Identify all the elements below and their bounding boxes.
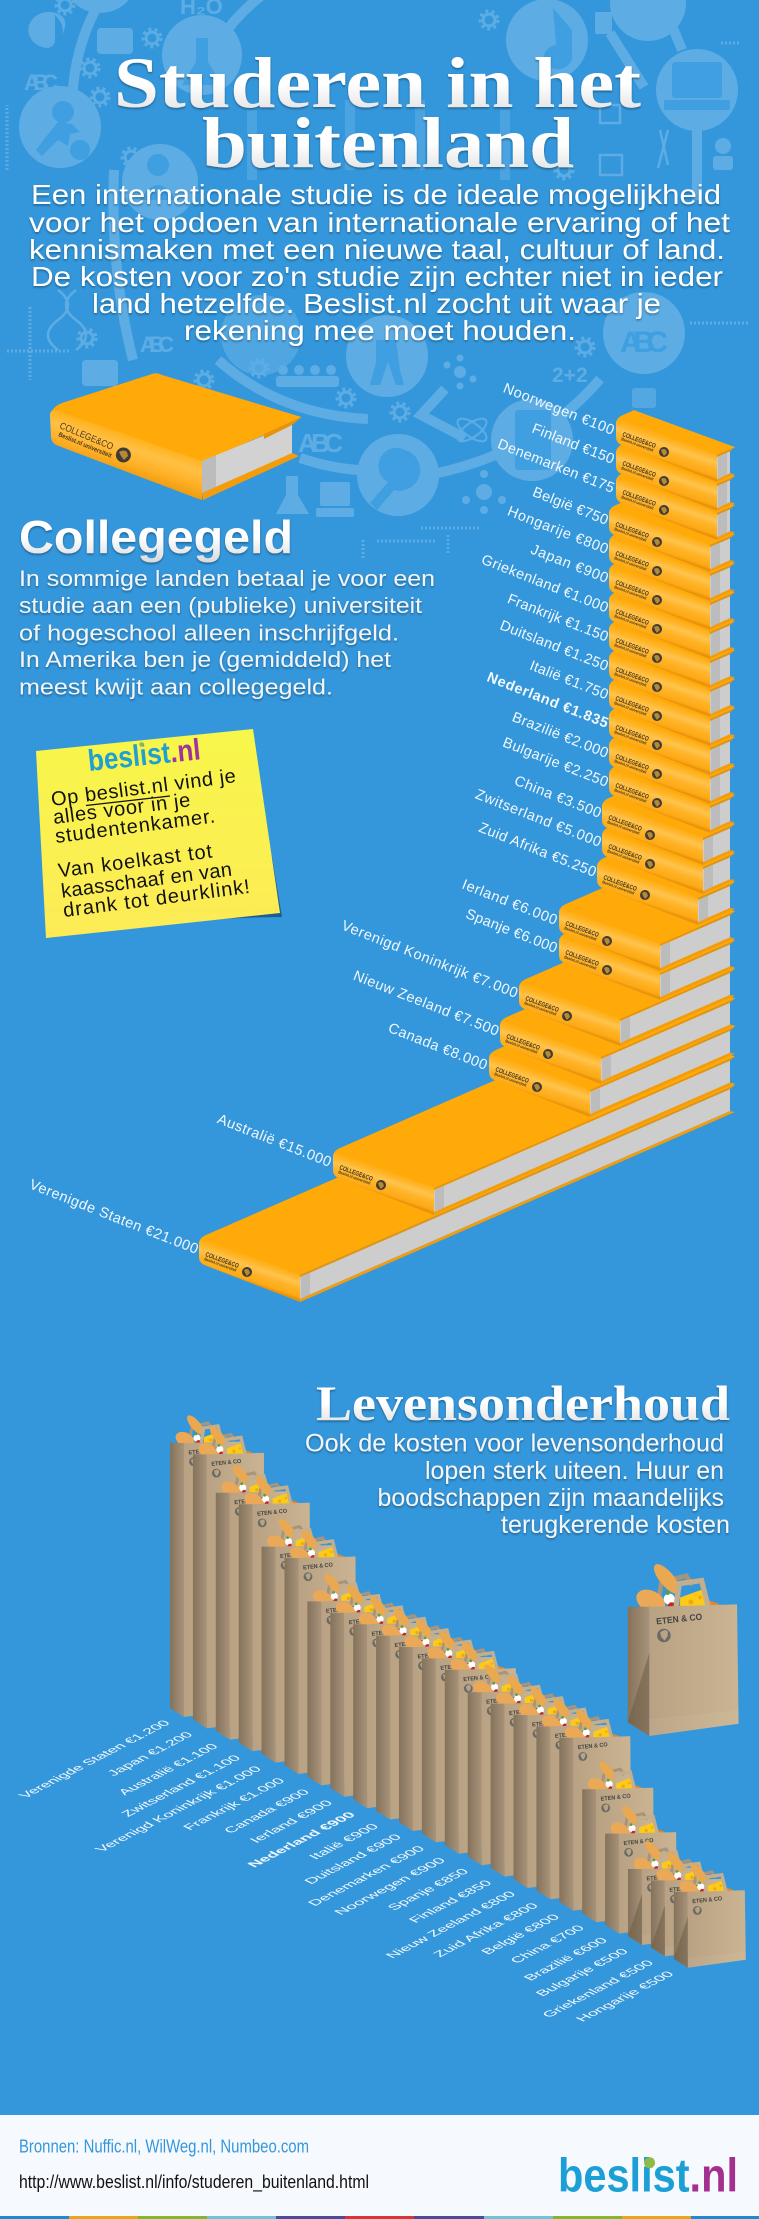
book: Noorwegen: COLLEGE&CO (621, 431, 657, 450)
bag: België (559, 1708, 631, 1911)
book: België (609, 497, 735, 572)
book: Ierland: Beslist.nl universiteit (564, 925, 598, 942)
bag: Brazilië (605, 1803, 677, 1934)
tuition labels: Zwitserland €5.000 (473, 787, 603, 851)
bag: Spanje (468, 1662, 540, 1865)
title: Studeren in het (114, 43, 641, 123)
tuition labels: Noorwegen €100 (501, 381, 616, 439)
book: Zuid Afrika: Beslist.nl universiteit (602, 879, 636, 896)
book: Brazilië: Beslist.nl universiteit (614, 758, 648, 775)
intro text: De kosten voor zo'n studie zijn echter niet in ieder (31, 261, 723, 292)
book: Denemarken: COLLEGE&CO (621, 489, 657, 508)
background pattern: education icons: 2+2 (552, 364, 588, 387)
cost of living labels: Zwitserland €1.100 (117, 1753, 244, 1818)
tuition labels: Italië €1.750 (527, 658, 610, 703)
cost of living labels: Spanje €850 (384, 1866, 472, 1912)
bag: Noorwegen: ETEN & CO (463, 1674, 494, 1683)
text block: tuition explanation: meest kwijt aan collegegeld. (19, 674, 333, 700)
bag: Italië (376, 1605, 448, 1820)
bag: Spanje: ETEN & CO (486, 1697, 517, 1706)
tuition labels: China €3.500 (512, 773, 603, 822)
background pattern: education icons: ABC (620, 326, 668, 359)
intro text: kennismaken met een nieuwe taal, cultuur of land. (29, 234, 725, 265)
cost of living labels: Frankrijk €1.000 (179, 1776, 288, 1832)
cost of living labels: China €700 (506, 1923, 588, 1965)
background pattern: education icons: ABC (24, 70, 58, 95)
text block: cost of living explanation: Ook de kosten voor levensonderhoud (305, 1430, 724, 1458)
bag: Australië (216, 1463, 288, 1740)
book: Frankrijk: COLLEGE&CO (614, 637, 650, 656)
bag: Hongarije (674, 1862, 746, 1968)
sticky note callout: Op beslist.nl vind je (50, 765, 237, 811)
bag: Denemarken: ETEN & CO (440, 1663, 471, 1672)
cost of living labels: Australië €1.100 (114, 1741, 222, 1797)
book: Nederland: Beslist.nl universiteit (614, 729, 648, 746)
cost of living labels: Nieuw Zeeland €800 (382, 1889, 519, 1960)
bag: China (582, 1759, 654, 1922)
book: Griekenland: Beslist.nl universiteit (614, 613, 648, 630)
bag: Italië: ETEN & CO (394, 1640, 425, 1649)
book: Japan: COLLEGE&CO (614, 579, 650, 598)
book: Finland: Beslist.nl universiteit (621, 465, 655, 482)
text block: cost of living explanation (305, 1430, 730, 1539)
book: Bulgarije: COLLEGE&CO (614, 782, 650, 801)
sources text: Bronnen: Nuffic.nl, WilWeg.nl, Numbeo.com (19, 2137, 309, 2157)
book: België: Beslist.nl universiteit (614, 526, 648, 543)
book: Spanje (559, 903, 735, 1000)
logo: beslist.nl: beslist.nl (558, 2149, 738, 2202)
tuition labels: Ierland €6.000 (460, 877, 559, 929)
cost of living labels: Denemarken €900 (304, 1844, 428, 1908)
book: Nederland: COLLEGE&CO (614, 724, 650, 743)
source url: http://www.beslist.nl/info/studeren_buitenland.html (19, 2172, 369, 2193)
book: Verenigde Staten: Beslist.nl universiteit (204, 1256, 238, 1273)
sticky note callout: beslist.nl (86, 733, 202, 778)
book: Australië: COLLEGE&CO (338, 1164, 374, 1183)
bag: Verenigde Staten (170, 1413, 242, 1717)
bag: Finland: ETEN & CO (509, 1708, 540, 1717)
bag: Zuid Afrika (536, 1696, 608, 1899)
bag: Denemarken (422, 1628, 494, 1842)
cost of living labels: Duitsland €900 (300, 1832, 405, 1886)
text block: tuition explanation: In Amerika ben je (gemiddeld) het (19, 647, 391, 672)
book: China: Beslist.nl universiteit (607, 819, 641, 836)
heading: Collegegeld: Collegegeld (19, 511, 293, 563)
book: Verenigde Staten: COLLEGE&CO (204, 1251, 240, 1270)
heading: Levensonderhoud: Levensonderhoud (316, 1375, 730, 1431)
book: Duitsland: Beslist.nl universiteit (614, 671, 648, 688)
bag: Bulgarije (628, 1839, 700, 1945)
chart: cost of living as grocery bags (170, 1413, 746, 1968)
book: Verenigde Staten (199, 1048, 735, 1302)
bag: Japan (193, 1424, 265, 1728)
bag: Nederland (353, 1594, 425, 1808)
text block: tuition explanation (19, 566, 435, 700)
book: Zuid Afrika: COLLEGE&CO (602, 874, 638, 893)
book: Zwitserland (602, 816, 735, 894)
icon: large college book: Beslist.nl universiteit (57, 431, 113, 460)
chart: tuition fees as stacked books (199, 410, 735, 1302)
cost of living labels (15, 1718, 677, 2023)
tuition labels: Australië €15.000 (215, 1111, 333, 1171)
book: Verenigd Koninkrijk (519, 932, 735, 1046)
bag: Zwitserland: ETEN & CO (257, 1509, 288, 1518)
book: Zwitserland: Beslist.nl universiteit (607, 848, 641, 865)
text block: tuition explanation: of hogeschool alleen inschrijfgeld. (19, 620, 399, 646)
cost of living labels: Hongarije €500 (572, 1969, 677, 2023)
bag: Brazilië: ETEN & CO (623, 1838, 654, 1847)
book: Noorwegen: Beslist.nl universiteit (621, 436, 655, 453)
book: Nieuw Zeeland: Beslist.nl universiteit (505, 1038, 539, 1055)
bag: Noorwegen (445, 1640, 517, 1854)
intro text: rekening mee moet houden. (184, 315, 576, 346)
tuition labels: Verenigde Staten €21.000 (27, 1177, 200, 1258)
bag: China: ETEN & CO (600, 1794, 631, 1803)
book: Italië (609, 671, 735, 746)
book: China (602, 787, 735, 865)
tuition labels: Nederland €1.835 (485, 670, 610, 732)
book: Hongarije (609, 526, 735, 601)
book: Griekenland (609, 584, 735, 659)
bag: Finland (491, 1673, 563, 1877)
icon: large college book: COLLEGE&CO (58, 421, 115, 453)
cost of living labels: Bulgarije €500 (532, 1946, 632, 1998)
intro text: Een internationale studie is de ideale mogelijkheid (31, 179, 721, 210)
text block: cost of living explanation: boodschappen zijn maandelijks (378, 1484, 724, 1512)
bag: Nieuw Zeeland: ETEN & CO (532, 1719, 563, 1728)
bag: Frankrijk (284, 1528, 356, 1774)
book: Bulgarije (609, 758, 735, 833)
title: buitenland (202, 103, 574, 183)
book: Italië: Beslist.nl universiteit (614, 700, 648, 717)
bag: Ierland: ETEN & CO (349, 1617, 379, 1626)
tuition labels (27, 381, 616, 1258)
sticky note callout: alles voor in je (52, 789, 191, 829)
bag: Duitsland (399, 1617, 471, 1831)
tuition labels: Hongarije €800 (505, 504, 610, 558)
colour strip (0, 2216, 759, 2219)
bag: Zwitserland (239, 1474, 311, 1751)
cost of living labels: Verenigd Koninkrijk €1.000 (91, 1764, 265, 1854)
text block: tuition explanation: In sommige landen betaal je voor een (19, 566, 435, 591)
book: Nieuw Zeeland: COLLEGE&CO (505, 1033, 541, 1052)
book: Noorwegen (616, 410, 735, 482)
sticky note callout: studentenkamer. (54, 805, 216, 848)
cost of living labels: Brazilië €600 (520, 1935, 611, 1982)
tuition labels: Canada €8.000 (386, 1020, 489, 1074)
cost of living labels: België €800 (477, 1912, 563, 1956)
bag: Nederland: ETEN & CO (371, 1629, 402, 1638)
book: China: COLLEGE&CO (607, 814, 643, 833)
bag: België: ETEN & CO (578, 1742, 608, 1751)
book: Australië: Beslist.nl universiteit (338, 1169, 372, 1186)
bag: Zuid Afrika: ETEN & CO (555, 1731, 586, 1740)
tuition labels: Verenigd Koninkrijk €7.000 (339, 918, 520, 1002)
sticky note callout: kaasschaaf en van (60, 859, 233, 903)
bag: Canada: ETEN & CO (326, 1606, 357, 1615)
icon: large college book (50, 373, 302, 500)
book: Frankrijk: Beslist.nl universiteit (614, 642, 648, 659)
book: Zwitserland: COLLEGE&CO (607, 843, 643, 862)
tuition labels: Spanje €6.000 (463, 906, 559, 957)
book: Finland (616, 439, 735, 511)
text block: tuition explanation: studie aan een (publieke) universiteit (19, 593, 422, 618)
bag: Ierland (330, 1583, 402, 1797)
tuition labels: Brazilië €2.000 (510, 709, 610, 762)
book: Japan: Beslist.nl universiteit (614, 584, 648, 601)
tuition labels: Griekenland €1.000 (479, 552, 610, 616)
tuition labels: Bulgarije €2.250 (500, 735, 610, 791)
tuition labels: Duitsland €1.250 (498, 618, 610, 675)
cost of living labels: Verenigde Staten €1.200 (15, 1718, 174, 1800)
book: Canada: Beslist.nl universiteit (494, 1071, 528, 1088)
icon: large grocery bag (628, 1560, 739, 1736)
book: Hongarije: COLLEGE&CO (614, 550, 650, 569)
bag: Canada (307, 1571, 379, 1785)
background pattern: education icons: ABC (298, 428, 343, 458)
book: Duitsland: COLLEGE&CO (614, 666, 650, 685)
cost of living labels: Zuid Afrika €800 (429, 1901, 542, 1959)
book: Canada (489, 990, 735, 1117)
book: Verenigd Koninkrijk: Beslist.nl universiteit (524, 1000, 558, 1017)
bag: Australië: ETEN & CO (234, 1497, 265, 1506)
icon: large grocery bag: ETEN & CO (656, 1612, 703, 1626)
tuition labels: Japan €900 (528, 542, 610, 587)
book: Japan (609, 555, 735, 630)
tuition labels: Denemarken €175 (495, 436, 616, 497)
sticky note callout: drank tot deurklink! (62, 876, 251, 922)
tuition labels: Finland €150 (530, 421, 616, 468)
book: Denemarken: Beslist.nl universiteit (621, 494, 655, 511)
book: Brazilië (609, 729, 735, 804)
text block: cost of living explanation: terugkerende kosten (501, 1511, 730, 1539)
tuition labels: Zuid Afrika €5.250 (476, 820, 598, 881)
book: België: COLLEGE&CO (614, 521, 650, 540)
cost of living labels: Noorwegen €900 (330, 1855, 449, 1917)
intro text: land hetzelfde. Beslist.nl zocht uit waar je (92, 288, 661, 319)
tuition labels: Nieuw Zeeland €7.500 (351, 968, 501, 1040)
book: Australië (333, 1020, 735, 1215)
book: Brazilië: COLLEGE&CO (614, 753, 650, 772)
bag: Nieuw Zeeland (514, 1685, 586, 1888)
cost of living labels: Finland €850 (405, 1878, 495, 1925)
background pattern: education icons (7, 0, 750, 560)
tuition labels: Frankrijk €1.150 (505, 591, 610, 645)
book: Finland: COLLEGE&CO (621, 460, 657, 479)
book: Verenigd Koninkrijk: COLLEGE&CO (524, 995, 560, 1014)
book: Bulgarije: Beslist.nl universiteit (614, 787, 648, 804)
book: Duitsland (609, 642, 735, 717)
sticky note callout: Van koelkast tot (57, 841, 214, 882)
book: Denemarken (616, 468, 735, 540)
cost of living labels: Italië €900 (305, 1821, 382, 1861)
book: Griekenland: COLLEGE&CO (614, 608, 650, 627)
bag: Hongarije: ETEN & CO (692, 1896, 723, 1905)
bag: Japan: ETEN & CO (211, 1459, 242, 1468)
book: Nieuw Zeeland (500, 961, 735, 1084)
text block: cost of living explanation: lopen sterk uiteen. Huur en (425, 1457, 724, 1485)
title (114, 43, 641, 183)
book: Spanje: Beslist.nl universiteit (564, 954, 598, 971)
bag: Bulgarije: ETEN & CO (646, 1873, 677, 1882)
bag: Verenigde Staten: ETEN & CO (188, 1447, 219, 1456)
bag: Verenigd Koninkrijk: ETEN & CO (280, 1551, 311, 1560)
book: Canada: COLLEGE&CO (494, 1066, 530, 1085)
bag: Duitsland: ETEN & CO (417, 1651, 448, 1660)
footer panel (0, 2115, 759, 2219)
bag: Verenigd Koninkrijk (262, 1516, 334, 1763)
bag: Frankrijk: ETEN & CO (303, 1562, 334, 1571)
bag: Griekenland (651, 1850, 723, 1956)
cost of living labels: Nederland €900 (244, 1810, 359, 1869)
book: Hongarije: Beslist.nl universiteit (614, 555, 648, 572)
book: Nederland (609, 700, 735, 775)
book: Ierland: COLLEGE&CO (564, 920, 600, 939)
book: Ierland (559, 874, 735, 971)
sticky note callout (36, 729, 282, 938)
background pattern: education icons: ABC (140, 332, 174, 357)
intro text: voor het opdoen van internationale ervaring of het (29, 207, 730, 238)
cost of living labels: Japan €1.200 (103, 1730, 196, 1778)
book: Spanje: COLLEGE&CO (564, 949, 600, 968)
book: Frankrijk (609, 613, 735, 688)
book: Italië: COLLEGE&CO (614, 695, 650, 714)
tuition labels: België €750 (530, 485, 610, 529)
cost of living labels: Canada €900 (220, 1787, 313, 1835)
cost of living labels: Griekenland €500 (538, 1958, 657, 2019)
cost of living labels: Ierland €900 (246, 1798, 336, 1845)
intro text (29, 179, 730, 346)
bag: Griekenland: ETEN & CO (669, 1885, 700, 1894)
book: Zuid Afrika (597, 845, 735, 925)
